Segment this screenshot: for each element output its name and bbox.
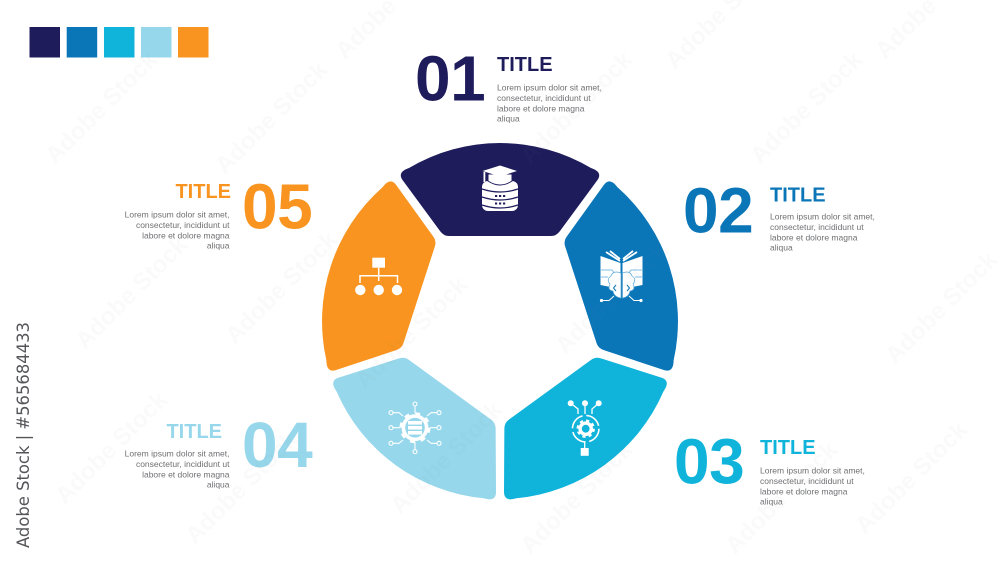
step 03 title: TITLE xyxy=(760,437,816,459)
step 01 description: labore et dolore magna xyxy=(497,103,585,113)
watermark: Adobe Stock xyxy=(220,226,343,349)
segment 4: light blue xyxy=(315,331,530,523)
step 05 description: consectetur, incididunt ut xyxy=(136,220,230,230)
step 01 description: consectetur, incididunt ut xyxy=(497,93,591,103)
step 02 description: Lorem ipsum dolor sit amet, xyxy=(770,212,875,222)
watermark: Adobe Stock xyxy=(50,386,173,509)
watermark: Adobe Stock xyxy=(210,56,333,179)
watermark: Adobe Stock xyxy=(385,396,508,519)
stock id side label: Adobe Stock | #565684433 xyxy=(14,322,33,548)
icon: gear with server and nodes xyxy=(389,402,441,454)
watermark: Adobe Stock xyxy=(550,236,673,359)
step 03 description: labore et dolore magna xyxy=(760,486,848,496)
step 04 number: 04 xyxy=(242,409,313,481)
step 03 number: 03 xyxy=(674,426,744,498)
step 05 number: 05 xyxy=(242,170,312,242)
watermark: Adobe Stock xyxy=(515,436,638,559)
segment 3: cyan xyxy=(470,331,685,523)
step 02 description: consectetur, incididunt ut xyxy=(770,222,864,232)
step 02 description: aliqua xyxy=(770,243,793,253)
icon: hierarchy xyxy=(355,258,402,295)
step 01 title: TITLE xyxy=(497,54,553,76)
watermark: Adobe Stock xyxy=(745,46,868,169)
watermark: Adobe Stock xyxy=(40,46,163,169)
step 01 number: 01 xyxy=(415,42,485,114)
step 05 description: Lorem ipsum dolor sit amet, xyxy=(125,210,230,220)
step 03 description: Lorem ipsum dolor sit amet, xyxy=(760,466,865,476)
colour swatches xyxy=(30,27,208,58)
step 02 number: 02 xyxy=(683,174,753,246)
step 01 description: Lorem ipsum dolor sit amet, xyxy=(497,82,602,92)
step 05 title: TITLE xyxy=(175,181,231,203)
segment 2: blue xyxy=(550,172,700,389)
watermark: Adobe Stock xyxy=(850,416,973,539)
step 04 title: TITLE xyxy=(166,421,222,443)
icon: book and brain xyxy=(600,251,643,302)
watermark: Adobe Stock xyxy=(880,246,1000,369)
watermark: Adobe Stock xyxy=(350,271,473,394)
icon: graduation cap on database xyxy=(482,166,518,211)
step 05 description: aliqua xyxy=(207,241,230,251)
step 02 description: labore et dolore magna xyxy=(770,232,858,242)
segment 1: navy xyxy=(401,143,599,236)
watermark: Adobe Stock xyxy=(720,436,843,559)
step 05 description: labore et dolore magna xyxy=(142,230,230,240)
watermark: Adobe Stock xyxy=(180,426,303,549)
step 04 description: labore et dolore magna xyxy=(142,469,230,479)
step 01 description: aliqua xyxy=(497,114,520,124)
step 03 description: aliqua xyxy=(760,497,783,507)
watermark: Adobe Stock xyxy=(70,231,193,354)
segment 5: orange xyxy=(300,172,450,389)
icon: gear process xyxy=(568,400,602,456)
step 03 description: consectetur, incididunt ut xyxy=(760,476,854,486)
step 04 description: aliqua xyxy=(207,480,230,490)
step 04 description: consectetur, incididunt ut xyxy=(136,459,230,469)
watermark: Adobe Stock xyxy=(515,46,638,169)
step 04 description: Lorem ipsum dolor sit amet, xyxy=(125,448,230,458)
step 02 title: TITLE xyxy=(770,184,826,206)
